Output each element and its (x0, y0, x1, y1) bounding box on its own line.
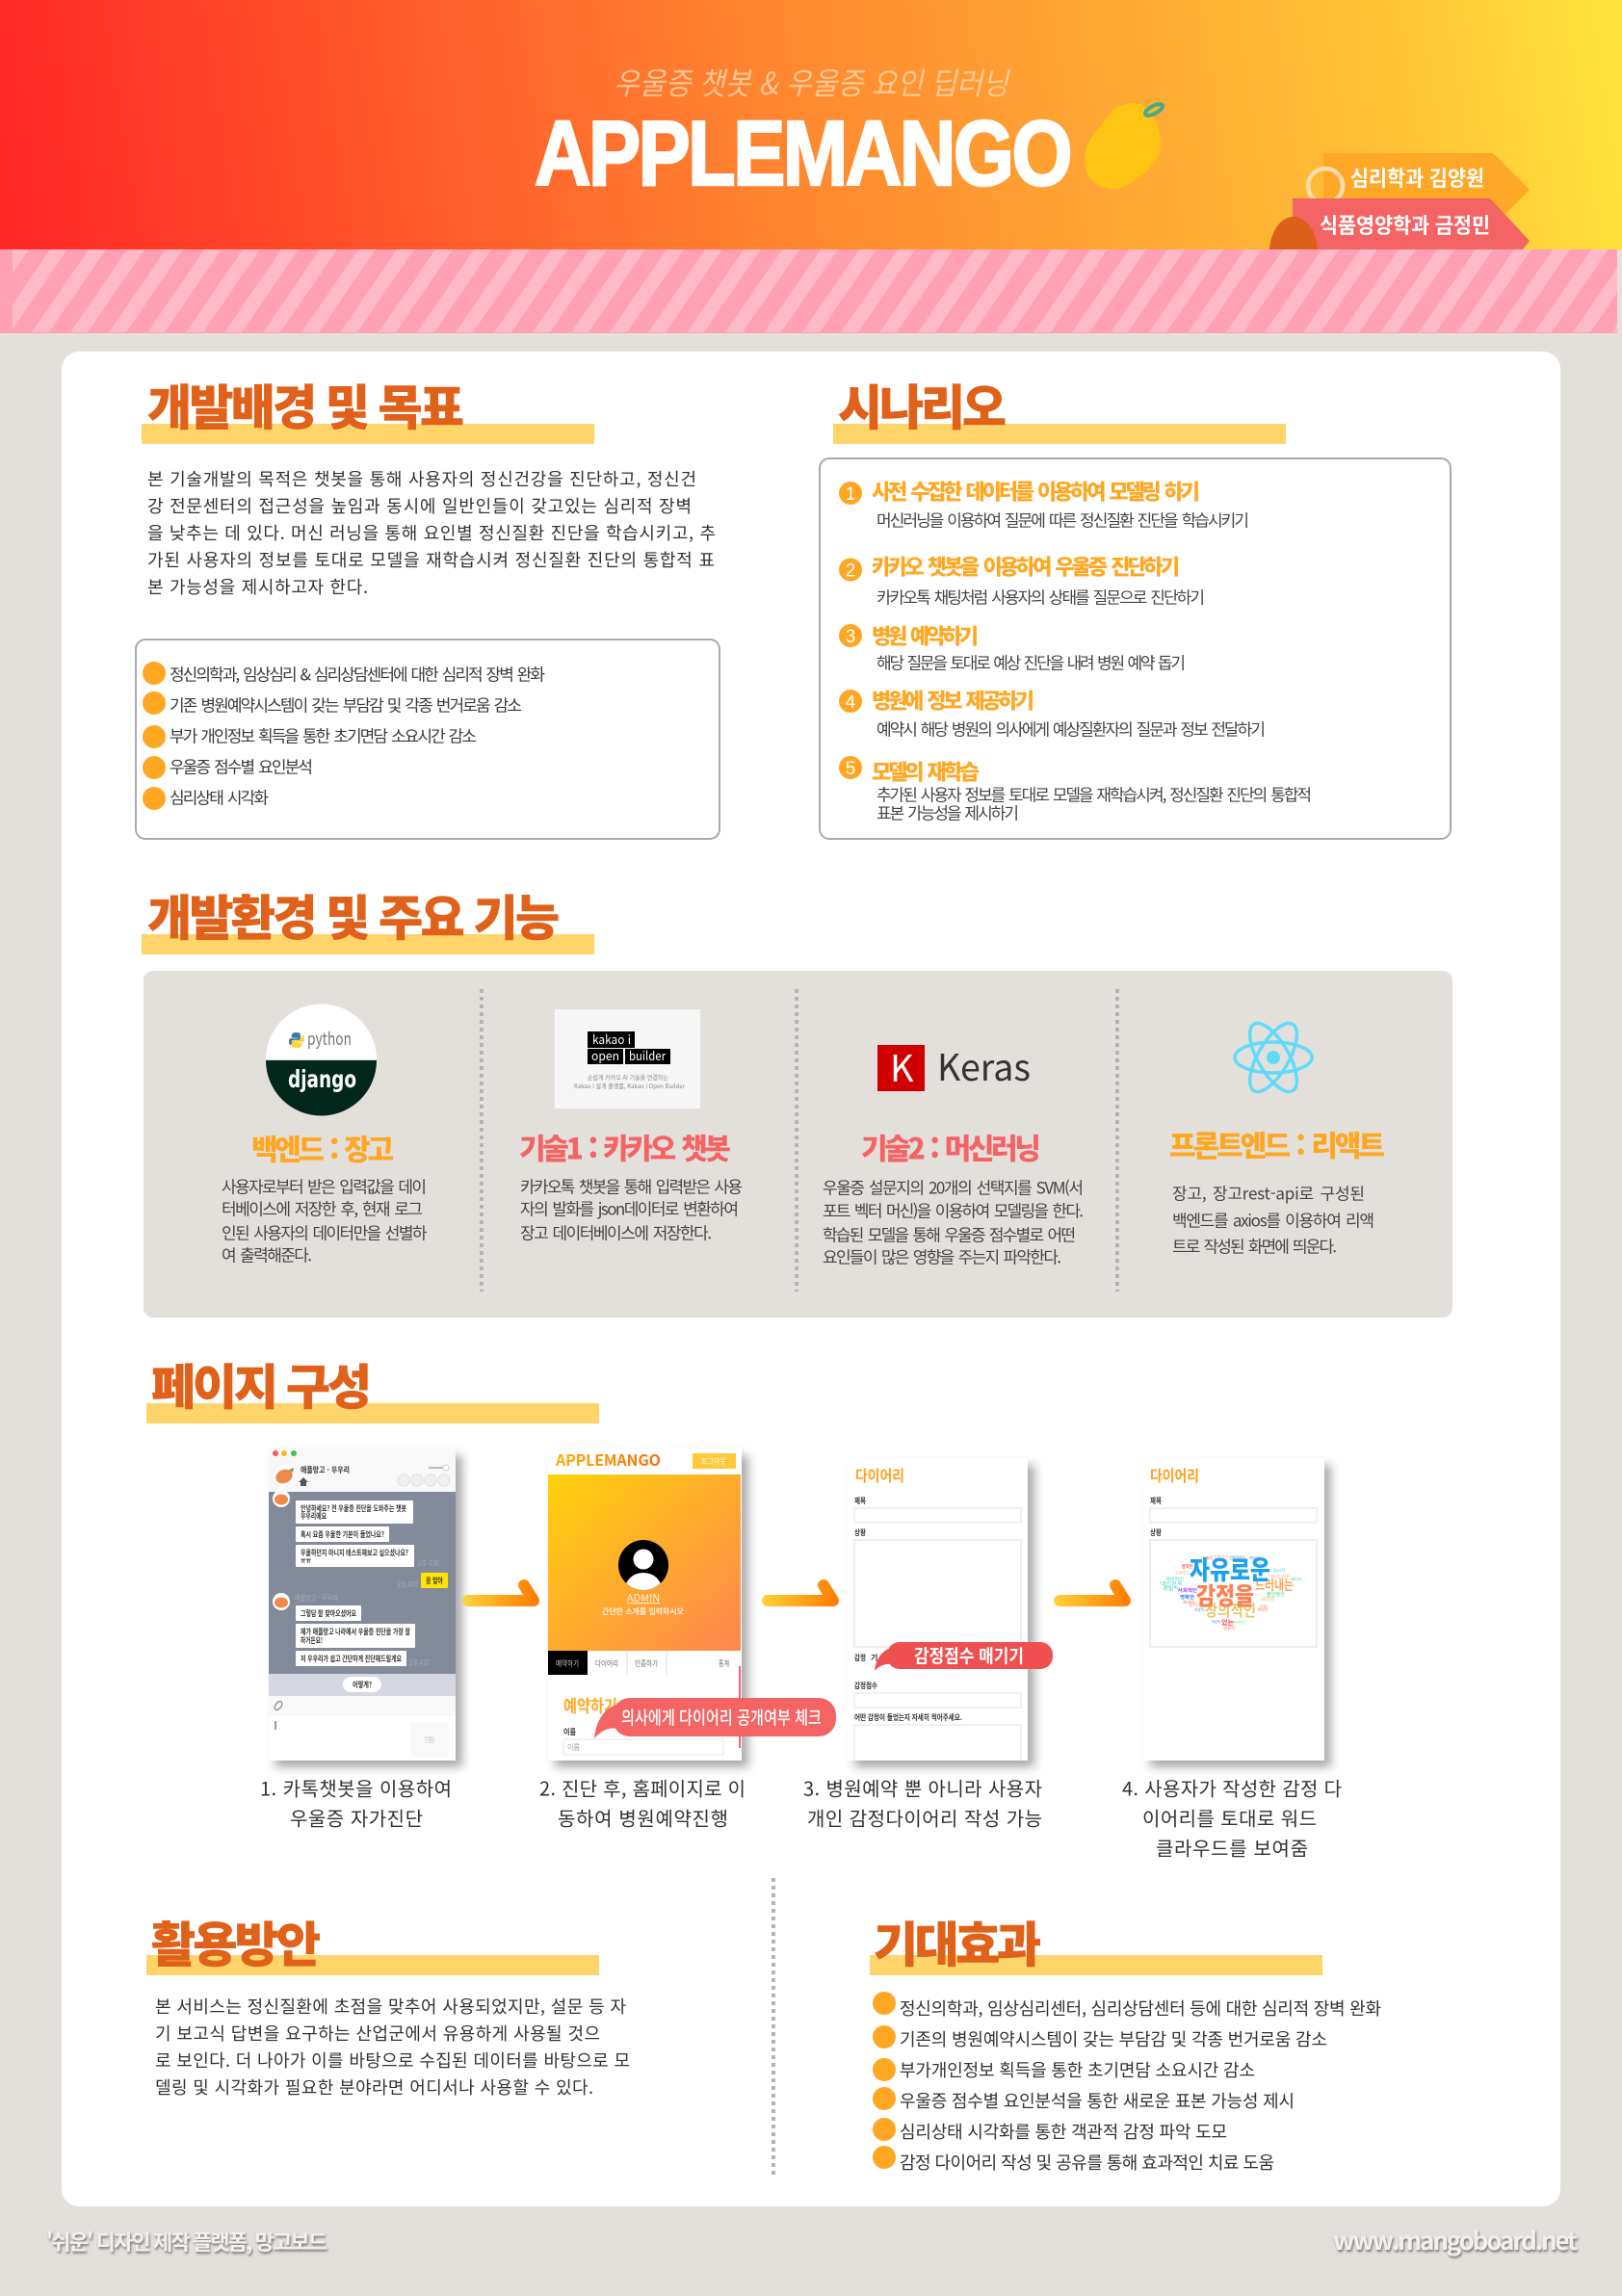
panel: tech stack (144, 971, 1452, 1318)
heading: 기대효과: 기대효과 (874, 1907, 1041, 1976)
screenshot: diary form: 상황 (854, 1527, 867, 1538)
column: kakao chatbot: 기술1 : 카카오 챗봇 (519, 1125, 731, 1167)
screenshot: kakao chatbot: 애플망고 - 우우리 (301, 1465, 350, 1475)
chat messages: 우울하던지 아니지 테스트해보고 싶으셨나요? (301, 1548, 408, 1558)
caption 4: 이어리를 토대로 워드 (1142, 1804, 1317, 1832)
list: expected effects: 우울증 점수별 요인분석을 통한 새로운 표본 가능성 제시 (900, 2088, 1295, 2113)
heading: 시나리오: 시나리오 (838, 370, 1007, 439)
word cloud: 자신의 (1212, 1619, 1220, 1625)
step 2: 카카오 챗봇을 이용하여 우울증 진단하기 (872, 550, 1180, 581)
column: frontend: 프론트엔드 : 리액트 (1169, 1122, 1385, 1164)
screenshot: home page: 이름 (567, 1742, 580, 1753)
screenshot: diary form: 다이어리 (855, 1463, 904, 1486)
icon: python django logo: python (307, 1026, 352, 1051)
word cloud: 명확한 (1180, 1594, 1194, 1601)
icon: python django logo: django (288, 1065, 356, 1093)
step 2 (839, 550, 1205, 609)
step 2: 2 (846, 561, 855, 582)
goal text (170, 661, 545, 809)
heading: 개발배경 및 목표: 개발배경 및 목표 (147, 370, 464, 439)
caption 1 (260, 1774, 452, 1832)
text block: background paragraph: 본 가능성을 제시하고자 한다. (147, 574, 368, 599)
word cloud: 대인관계 (1161, 1580, 1182, 1587)
column: backend: 백엔드 : 장고 (251, 1126, 394, 1168)
chat messages: 오후 4:07 (397, 1579, 418, 1590)
text block: background paragraph: 가된 사용자의 정보를 토대로 모델을 재학습시켜 정신질환 진단의 통합적 표 (147, 547, 715, 572)
step 3: 해당 질문을 토대로 예상 진단을 내려 병원 예약 돕기 (876, 649, 1186, 674)
navigation tabs: 다이어리 (595, 1658, 618, 1669)
heading: 시나리오 (833, 370, 1286, 444)
header banner (0, 0, 1622, 249)
step 1: 머신러닝을 이용하여 질문에 따른 정신질환 진단을 학습시키기 (876, 507, 1249, 532)
caption 4: 클라우드를 보여줌 (1156, 1834, 1308, 1862)
navigation tabs: 인증하기 (635, 1658, 658, 1669)
kakao description: 자의 발화를 json데이터로 변환하여 (520, 1196, 739, 1219)
step 4: 병원에 정보 제공하기 (872, 684, 1034, 715)
list: expected effects (873, 1992, 1381, 2175)
heading: 활용방안 (146, 1907, 599, 1976)
screenshot: home page: 로그아웃 (701, 1456, 726, 1467)
word cloud: 불안정한 (1267, 1591, 1285, 1598)
icon: kakao i open builder card: kakao i (592, 1030, 631, 1048)
navigation tabs: 통계 (719, 1658, 729, 1669)
word cloud: 두드러진 (1271, 1574, 1291, 1580)
text block: usage paragraph: 로 보인다. 더 나아가 이를 바탕으로 수집된 데이터를 바탕으로 모 (155, 2048, 630, 2073)
text block: background paragraph: 본 기술개발의 목적은 챗봇을 통해 사용자의 정신건강을 진단하고, 정신건 (147, 466, 696, 491)
text block: background paragraph (147, 466, 716, 599)
react description: 백엔드를 axios를 이용하여 리액 (1172, 1208, 1374, 1231)
tag: 심리학과 김양원: 심리학과 김양원 (1350, 162, 1484, 193)
chat messages: ㅠㅠ (301, 1555, 311, 1566)
react description: 트로 작성된 화면에 띄운다. (1172, 1233, 1337, 1258)
keras description: 포트 벡터 머신)을 이용하여 모델링을 한다. (823, 1198, 1084, 1221)
word cloud: 까다로운 (1257, 1606, 1269, 1613)
screenshot: diary form: 제목 (854, 1496, 867, 1506)
word cloud: 창의적인 (1205, 1598, 1256, 1621)
chat messages: 그렇담 잘 찾아오셨어요 (301, 1608, 356, 1619)
screenshot: diary with word cloud: 제목 (1150, 1496, 1163, 1506)
text block: usage paragraph (155, 1994, 630, 2100)
backend description: 여 출력해준다. (222, 1242, 312, 1265)
arrow 1 (468, 1585, 534, 1601)
vertical divider (772, 1878, 775, 2179)
list: expected effects: 부가개인정보 획득을 통한 초기면담 소요시간 감소 (900, 2057, 1255, 2082)
word cloud: 강한 (1259, 1604, 1268, 1610)
icon: kakao i open builder card (555, 1009, 700, 1109)
backend description: 인된 사용자의 데이터만을 선별하 (222, 1219, 428, 1244)
backend description (222, 1173, 428, 1265)
text block: usage paragraph: 본 서비스는 정신질환에 초점을 맞추어 사용되었지만, 설문 등 자 (155, 1994, 626, 2019)
step 4 (839, 684, 1266, 740)
arrow 2 (768, 1585, 833, 1601)
step 4: 4 (846, 692, 856, 713)
word cloud: 솔직 (1206, 1554, 1213, 1561)
word cloud: 침착한 (1189, 1602, 1202, 1608)
heading: 페이지 구성 (146, 1349, 599, 1423)
caption 2: 동하여 병원예약진행 (558, 1804, 728, 1832)
kakao description (520, 1173, 743, 1244)
icon: keras logo (877, 1038, 1031, 1092)
word cloud: 자발적인 (1214, 1554, 1228, 1561)
word cloud: 있는 (1221, 1618, 1235, 1628)
word cloud: 분리된 (1233, 1619, 1245, 1626)
word cloud: 솔직한 (1182, 1563, 1192, 1570)
react description: 장고, 장고rest-api로 구성된 (1172, 1181, 1365, 1204)
word cloud: 감정을 (1196, 1578, 1254, 1612)
screenshot: home page (548, 1448, 742, 1761)
step 3 (839, 619, 1186, 674)
word cloud: 개방적인 (1165, 1576, 1184, 1582)
screenshot: diary form: 기 (871, 1653, 877, 1663)
caption 1: 1. 카톡챗봇을 이용하여 (260, 1774, 452, 1802)
goal text: 부가 개인정보 획득을 통한 초기면담 소요시간 감소 (170, 722, 477, 747)
caption 2: 2. 진단 후, 홈페이지로 이 (539, 1774, 746, 1802)
heading: 기대효과 (870, 1907, 1322, 1976)
word cloud: 부정적 (1223, 1625, 1235, 1631)
tag: 식품영양학과 금정민 (1269, 198, 1530, 249)
screenshot: home page: 예약하기 (563, 1693, 617, 1718)
chat messages: 오후 4:06 (417, 1558, 439, 1569)
chat messages: 응 맞아 (426, 1576, 443, 1586)
chat messages: 우우리에요 (301, 1511, 327, 1522)
screenshot: diary form: 어떤 감정이 들었는지 자세히 적어주세요. (854, 1712, 962, 1723)
word cloud: 사회적인 (1178, 1587, 1197, 1594)
kakao description: 장고 데이터베이스에 저장한다. (520, 1219, 712, 1244)
chat messages: 저 우우리가 쉽고 간단하게 진단해드릴게요 (301, 1654, 402, 1664)
step 1: 1 (846, 484, 855, 505)
subtitle: 우울증 챗봇 & 우울증 요인 딥러닝 (614, 60, 1010, 104)
word cloud: 자유로운 (1190, 1550, 1270, 1587)
icon: kakao i open builder card: Kakao i 설계 플랫폼, Kakao i Open Builder (574, 1081, 685, 1090)
word cloud: 자기의 (1183, 1599, 1194, 1605)
backend description: 터베이스에 저장한 후, 현재 로그 (222, 1196, 423, 1219)
navigation tabs: 예약하기 (556, 1658, 579, 1669)
screenshot: diary form: 감정 (854, 1653, 866, 1663)
title: APPLEMANGO: APPLEMANGO (535, 102, 1070, 205)
screenshot: home page: 이름 (563, 1727, 577, 1737)
footer right watermark: www.mangoboard.net (1333, 2222, 1578, 2257)
icon: keras logo: Keras (937, 1038, 1031, 1091)
kakao description: 카카오톡 챗봇을 통해 입력받은 사용 (520, 1173, 743, 1198)
caption 1: 우울증 자가진단 (290, 1804, 423, 1832)
step 2: 카카오톡 채팅처럼 사용자의 상태를 질문으로 진단하기 (876, 584, 1205, 609)
text block: background paragraph: 을 낮추는 데 있다. 머신 러닝을 통해 요인별 정신질환 진단을 학습시키고, 추 (147, 520, 716, 545)
white content card (62, 352, 1560, 2206)
column: kakao chatbot (519, 1009, 743, 1244)
screenshot: kakao chatbot: 어떻게? (353, 1680, 372, 1690)
caption 3: 개인 감정다이어리 작성 가능 (807, 1804, 1042, 1832)
heading: 페이지 구성: 페이지 구성 (151, 1349, 372, 1419)
keras description (823, 1175, 1084, 1267)
list: expected effects: 기존의 병원예약시스템이 갖는 부담감 및 각종 번거로움 감소 (900, 2026, 1327, 2051)
screenshot: home page: 간단한 소개를 입력하시오 (602, 1606, 685, 1617)
screenshot: kakao chatbot: 전송 (424, 1735, 435, 1745)
screenshot: diary form (848, 1458, 1028, 1761)
word cloud: 감정적인 (1229, 1554, 1244, 1561)
text block: usage paragraph: 델링 및 시각화가 필요한 분야라면 어디서나 사용할 수 있다. (155, 2074, 593, 2100)
heading: 개발환경 및 주요 기능: 개발환경 및 주요 기능 (147, 880, 560, 950)
step 3: 3 (846, 627, 855, 647)
step 5: 표본 가능성을 제시하기 (876, 799, 1019, 824)
list: expected effects: 심리상태 시각화를 통한 객관적 감정 파악 도모 (900, 2119, 1227, 2144)
backend description: 사용자로부터 받은 입력값을 데이 (222, 1173, 427, 1198)
profile avatar (618, 1540, 668, 1590)
word cloud: 개방적 (1248, 1555, 1260, 1561)
step 5 (839, 755, 1312, 824)
icon: kakao i open builder card: 손쉽게 카카오 AI 기술을 연결하는 (588, 1072, 668, 1082)
word cloud: 스트레스 (1175, 1570, 1190, 1577)
striped band (0, 249, 1617, 333)
panel: scenario steps (820, 458, 1451, 839)
icon: react atom (1235, 1016, 1312, 1099)
step 4: 예약시 해당 병원의 의사에게 예상질환자의 질문과 정보 전달하기 (876, 717, 1266, 740)
goal text: 정신의학과, 임상심리 & 심리상담센터에 대한 심리적 장벽 완화 (170, 661, 545, 686)
arrow 3 (1060, 1585, 1125, 1601)
icon: kakao i open builder card: open (591, 1046, 619, 1064)
chat messages: 하거든요! (301, 1635, 323, 1646)
list: expected effects: 감정 다이어리 작성 및 공유를 통해 효과적인 치료 도움 (900, 2150, 1274, 2175)
callout: 감정점수 매기기: 감정점수 매기기 (914, 1642, 1024, 1668)
caption 4 (1122, 1774, 1342, 1862)
word cloud: 정서적 (1273, 1567, 1285, 1574)
screenshot: diary with word cloud: 다이어리 (1150, 1463, 1199, 1486)
goal text: 기존 병원예약시스템이 갖는 부담감 및 각종 번거로움 감소 (170, 691, 522, 717)
caption 3 (803, 1774, 1042, 1832)
step 1 (839, 475, 1249, 532)
callout: 의사에게 다이어리 공개여부 체크 (594, 1698, 836, 1738)
footer left watermark: '쉬운' 디자인 제작 플랫폼, 망고보드 (46, 2226, 327, 2257)
callout: 감정점수 매기기 (875, 1642, 1053, 1671)
goal bullets (143, 662, 166, 810)
chat messages: 혹시 요즘 우울한 기분이 들었나요? (301, 1529, 384, 1540)
chat messages: 오후 4:07 (408, 1657, 430, 1668)
column: frontend (1169, 1016, 1385, 1258)
text block: background paragraph: 강 전문센터의 접근성을 높임과 동시에 일반인들이 갖고있는 심리적 장벽 (147, 493, 692, 518)
column: backend (222, 1004, 428, 1265)
step 3: 병원 예약하기 (872, 619, 979, 650)
chat messages (273, 1490, 448, 1668)
callout: 의사에게 다이어리 공개여부 체크: 의사에게 다이어리 공개여부 체크 (621, 1704, 822, 1730)
word cloud: 경험적 (1163, 1585, 1179, 1592)
column: machine learning: 기술2 : 머신러닝 (861, 1125, 1041, 1167)
keras description: 학습된 모델을 통해 우울증 점수별로 어떤 (823, 1221, 1076, 1246)
heading: 활용방안: 활용방안 (151, 1907, 321, 1976)
word cloud: 외향적 (1194, 1606, 1204, 1613)
screenshot: kakao chatbot (269, 1448, 456, 1761)
step 5: 모델의 재학습 (872, 755, 980, 786)
chat messages: 제가 애플망고 나라에서 우울증 진단을 가장 잘 (301, 1627, 410, 1637)
word cloud: 예민한 (1291, 1577, 1303, 1582)
icon: python django logo (266, 1004, 377, 1115)
goal text: 심리상태 시각화 (170, 784, 269, 809)
word cloud: 드러내는 (1255, 1576, 1294, 1595)
tag: 식품영양학과 금정민: 식품영양학과 금정민 (1320, 209, 1490, 240)
heading: 개발배경 및 목표 (142, 370, 594, 444)
list: expected effects: 정신의학과, 임상심리센터, 심리상담센터 등에 대한 심리적 장벽 완화 (900, 1996, 1381, 2021)
navigation tabs (548, 1651, 729, 1675)
text block: usage paragraph: 기 보고식 답변을 요구하는 산업군에서 유용하게 사용될 것으 (155, 2021, 600, 2046)
chat messages: 애플망고 - 우우리 (295, 1593, 338, 1604)
keras description: 우울증 설문지의 20개의 선택지를 SVM(서 (823, 1175, 1084, 1198)
step 1: 사전 수집한 데이터를 이용하여 모델링 하기 (872, 475, 1200, 506)
icon: keras logo: K (890, 1039, 914, 1092)
screenshot: diary form: 감정점수 (854, 1681, 878, 1691)
word cloud (1161, 1550, 1303, 1631)
screenshot: diary with word cloud: 상황 (1150, 1527, 1163, 1538)
react description (1172, 1181, 1374, 1258)
caption 3: 3. 병원예약 뿐 아니라 사용자 (803, 1774, 1042, 1802)
chat messages: 안녕하세요? 전 우울증 진단을 도와주는 챗봇 (301, 1503, 406, 1514)
column: machine learning (823, 1038, 1084, 1267)
caption 4: 4. 사용자가 작성한 감정 다 (1122, 1774, 1342, 1802)
word cloud: 자유로운 (1232, 1556, 1246, 1563)
icon: kakao i open builder card: builder (629, 1046, 667, 1064)
step 5: 5 (846, 759, 855, 779)
caption 2 (539, 1774, 746, 1832)
screenshot: diary with word cloud (1143, 1458, 1324, 1761)
mini logo: APPLEMANGO (555, 1448, 661, 1471)
step 5: 추가된 사용자 정보를 토대로 모델을 재학습시켜, 정신질환 진단의 통합적 (876, 782, 1312, 805)
keras description: 요인들이 많은 영향을 주는지 파악한다. (823, 1244, 1061, 1267)
tag: 심리학과 김양원 (1308, 153, 1530, 214)
screenshot: home page: ADMIN (627, 1590, 660, 1605)
goal text: 우울증 점수별 요인분석 (170, 753, 313, 778)
word cloud: 표현한 (1261, 1596, 1275, 1603)
icon: mango (1085, 102, 1164, 189)
panel: goals list (136, 639, 719, 839)
